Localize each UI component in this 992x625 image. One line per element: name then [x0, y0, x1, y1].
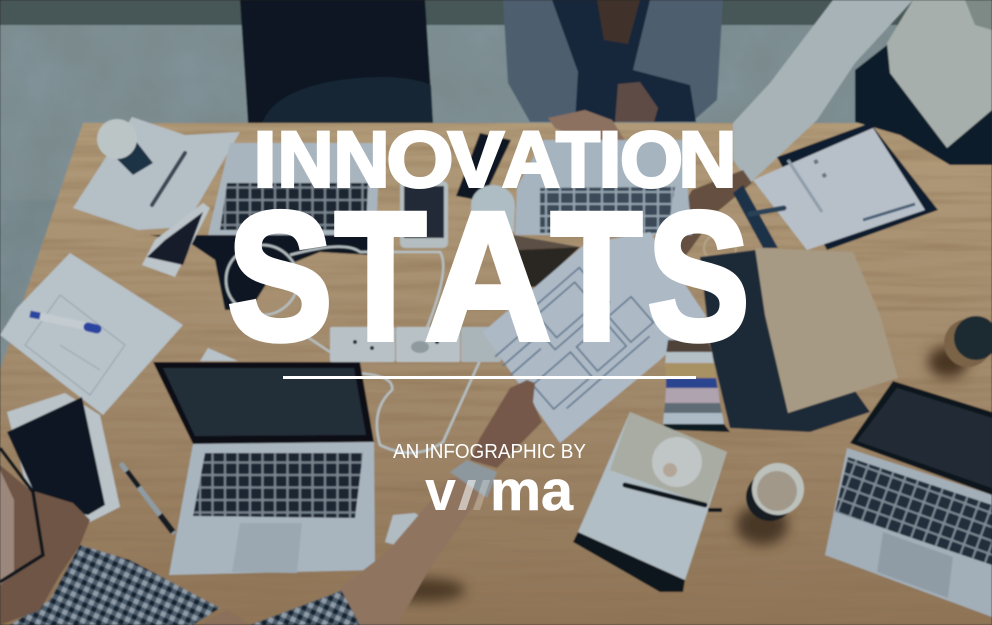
paper with pen, top left [73, 117, 240, 230]
title: INNOVATION: I [598, 114, 622, 204]
title: INNOVATION: O [386, 114, 454, 204]
title: INNOVATION: N [278, 114, 334, 204]
title: INNOVATION: N [678, 114, 736, 204]
wall strip [0, 0, 992, 25]
title: INNOVATION: A [502, 114, 560, 204]
dark notebook and tan book [700, 248, 898, 432]
open binder top right [733, 123, 938, 250]
title: STATS: T [551, 174, 642, 378]
person top centre [503, 0, 723, 172]
logo: vilma: ma [490, 459, 574, 523]
person right: trousers, shirt, sleeve, arm [648, 0, 992, 285]
paper scrap behind laptop [200, 348, 238, 361]
title: INNOVATION: N [334, 114, 390, 204]
concrete floor [0, 0, 992, 400]
cup centre [471, 185, 515, 232]
cactus plant [928, 316, 992, 378]
title: STATS: S [228, 174, 332, 378]
laptop top right [513, 140, 692, 287]
black phone [456, 133, 511, 201]
man at bottom left: shirt, face and glasses [0, 448, 362, 625]
title: STATS: T [335, 174, 426, 378]
pen [122, 465, 173, 532]
striped book [663, 340, 730, 432]
title: INNOVATION: T [556, 114, 600, 204]
document paper left [0, 253, 183, 415]
arm, watch and hand reaching [340, 380, 542, 625]
laptop bottom left [153, 362, 375, 575]
logo: vilma: v [425, 459, 456, 523]
title: INNOVATION: O [620, 114, 683, 204]
divider rule [283, 376, 696, 379]
black notebook left [7, 393, 120, 522]
logo: vilma [425, 459, 574, 523]
title: STATS: A [425, 174, 551, 378]
marker pen on paper [30, 314, 97, 329]
title: INNOVATION: I [254, 114, 276, 204]
title: INNOVATION: V [448, 114, 504, 204]
power strip [330, 327, 501, 362]
laptop top left [150, 143, 380, 310]
laptop right [825, 381, 992, 617]
coffee cup [736, 463, 804, 545]
blueprint paper [483, 232, 706, 443]
phone centre [400, 181, 448, 248]
byline: AN INFOGRAPHIC BY [393, 441, 586, 463]
black chair [240, 0, 433, 123]
notebook with glass and pen, bottom centre [573, 412, 727, 592]
white phone [142, 203, 210, 277]
coffee cup, top left [97, 119, 153, 175]
paper cup bottom [385, 513, 425, 545]
cables [226, 245, 487, 453]
title: STATS: S [648, 174, 750, 378]
